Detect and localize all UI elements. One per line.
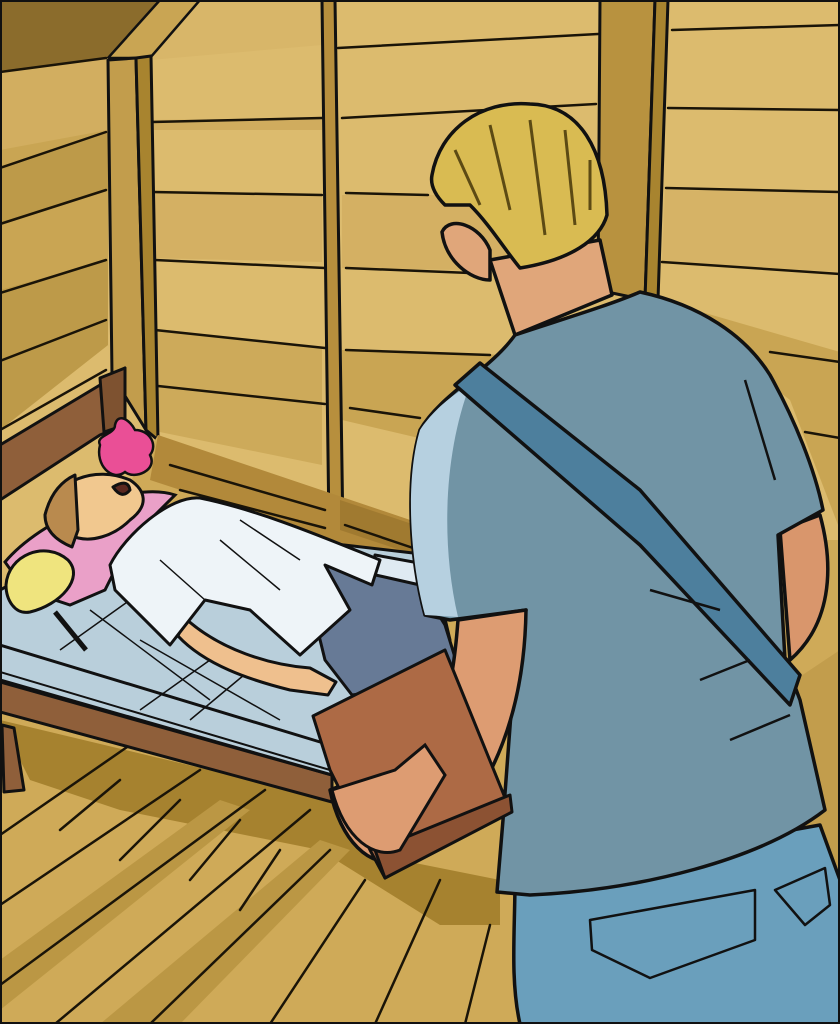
holding hand: [332, 745, 445, 852]
floor: [0, 435, 840, 1024]
jeans: [514, 825, 840, 1024]
sloped ceiling panel: [108, 0, 322, 60]
vertical post centre: [322, 0, 343, 535]
bed mattress and frame: [0, 520, 450, 802]
vertical post right: [598, 0, 668, 300]
white sheet edge: [370, 555, 430, 590]
neck: [490, 240, 612, 335]
left wall: [0, 58, 108, 430]
left arm: [330, 610, 526, 862]
bed headboard: [0, 368, 125, 500]
corner beam: [108, 56, 158, 440]
ear: [442, 224, 490, 280]
attic ceiling corner: [0, 0, 160, 72]
dark trousers: [300, 558, 462, 695]
white shirt: [110, 498, 380, 655]
shirt highlight: [411, 385, 470, 617]
hair: [432, 104, 607, 268]
pillow: [5, 492, 175, 605]
shirt fold lines: [650, 380, 790, 740]
back wall: [0, 0, 840, 600]
lying person: [45, 474, 462, 695]
shirt: [411, 292, 825, 895]
shoulder strap: [455, 363, 800, 705]
right arm: [780, 515, 828, 660]
head: [45, 474, 143, 539]
standing man: [330, 104, 840, 1024]
brown folder: [313, 650, 512, 878]
pink flower: [99, 418, 153, 475]
yellow fan: [6, 551, 86, 650]
arm: [178, 618, 336, 695]
